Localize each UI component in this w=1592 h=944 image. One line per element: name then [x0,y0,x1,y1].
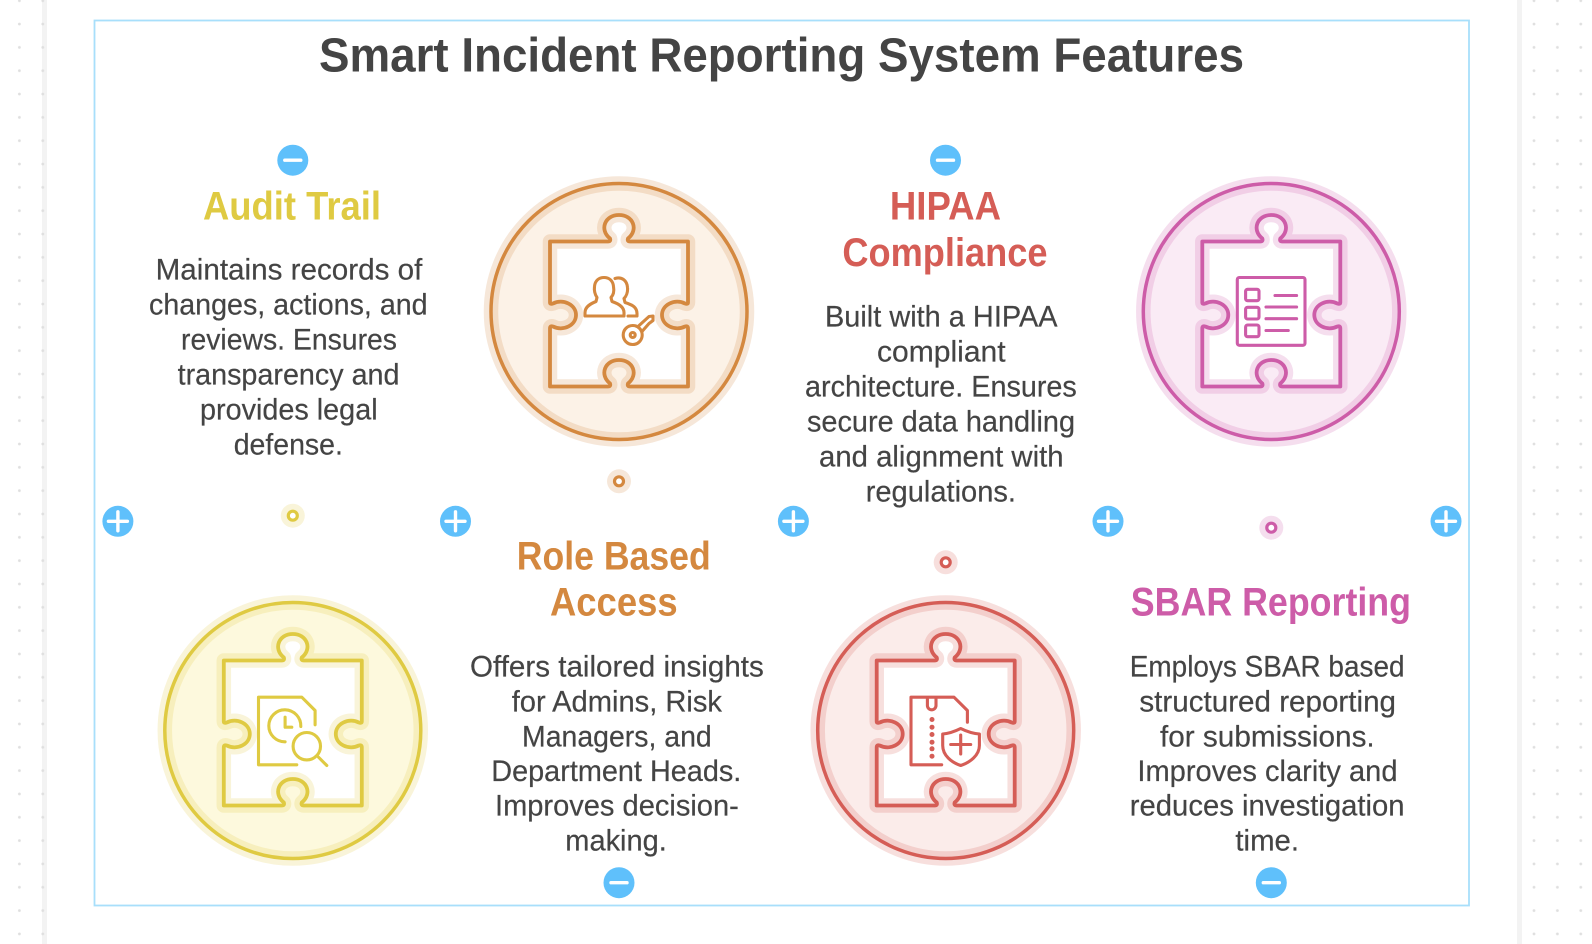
text: role based access description: Managers, and [522,720,712,753]
text: audit trail description: defense. [234,428,343,461]
text: role based access description [470,651,764,858]
text: role based access description: Department Heads. [491,755,741,788]
icon: minus button hipaa compliance [930,145,961,176]
text: sbar reporting description: for submissions. [1160,720,1375,753]
connector dot: hipaa compliance [934,550,958,574]
text: sbar reporting description: Improves clarity and [1137,755,1398,788]
text: hipaa compliance description: compliant [877,336,1006,369]
panel: hipaa compliance [805,145,1077,858]
text: role based access description: making. [565,825,667,858]
connector dot: audit trail [281,504,305,528]
text: audit trail description: transparency and [178,358,400,392]
heading: Audit Trail: Audit Trail [203,184,381,228]
heading: HIPAA Compliance [842,184,1048,275]
icon: pink puzzle with checklist [1143,184,1399,440]
text: hipaa compliance description: Built with a HIPAA [825,301,1058,334]
icon: minus button role based access [604,867,634,898]
text: sbar reporting description: reduces investigation [1130,790,1404,823]
icon: plus button 4 [1092,506,1124,537]
icon: plus button 2 [440,506,471,537]
text: sbar reporting description: time. [1235,825,1299,858]
heading: Role Based Access: Access [550,581,678,625]
icon: plus button 1 [102,506,133,537]
heading: Role Based Access [517,534,711,625]
text: audit trail description: Maintains records of [156,254,423,286]
text: sbar reporting description [1130,651,1404,858]
icon: yellow puzzle with clock document and magnifier [165,602,421,858]
text: hipaa compliance description: secure data handling [807,406,1075,439]
panel: audit trail [149,145,428,858]
icon: minus button sbar reporting [1256,867,1287,898]
heading: Role Based Access: Role Based [517,534,711,578]
icon: orange puzzle with users and key [491,184,747,440]
heading: SBAR Reporting: SBAR Reporting [1131,581,1411,625]
text: role based access description: Offers tailored insights [470,651,764,684]
title: Smart Incident Reporting System Features [319,29,1244,83]
text: audit trail description: provides legal [200,394,378,426]
text: hipaa compliance description: regulations. [866,476,1016,509]
heading: HIPAA Compliance: HIPAA [890,184,1001,228]
icon: red puzzle with zip document and shield [818,602,1074,858]
text: audit trail description: reviews. Ensures [181,324,397,356]
text: role based access description: Improves decision- [495,790,739,823]
text: audit trail description [149,254,428,461]
text: hipaa compliance description: architecture. Ensures [805,371,1077,404]
heading: HIPAA Compliance: Compliance [842,231,1048,275]
text: audit trail description: changes, actions, and [149,288,428,322]
text: hipaa compliance description [805,301,1077,509]
text: hipaa compliance description: and alignment with [819,441,1064,474]
icon: plus button 5 [1430,506,1462,537]
panel: sbar reporting [1130,184,1411,898]
panel: role based access [470,184,764,898]
connector dot: sbar reporting [1259,516,1283,540]
text: sbar reporting description: Employs SBAR based [1130,651,1404,684]
text: role based access description: for Admins, Risk [512,686,722,718]
text: sbar reporting description: structured reporting [1139,686,1396,718]
icon: minus button audit trail [277,145,308,176]
connector dot: role based access [607,469,631,493]
icon: plus button 3 [778,506,809,537]
